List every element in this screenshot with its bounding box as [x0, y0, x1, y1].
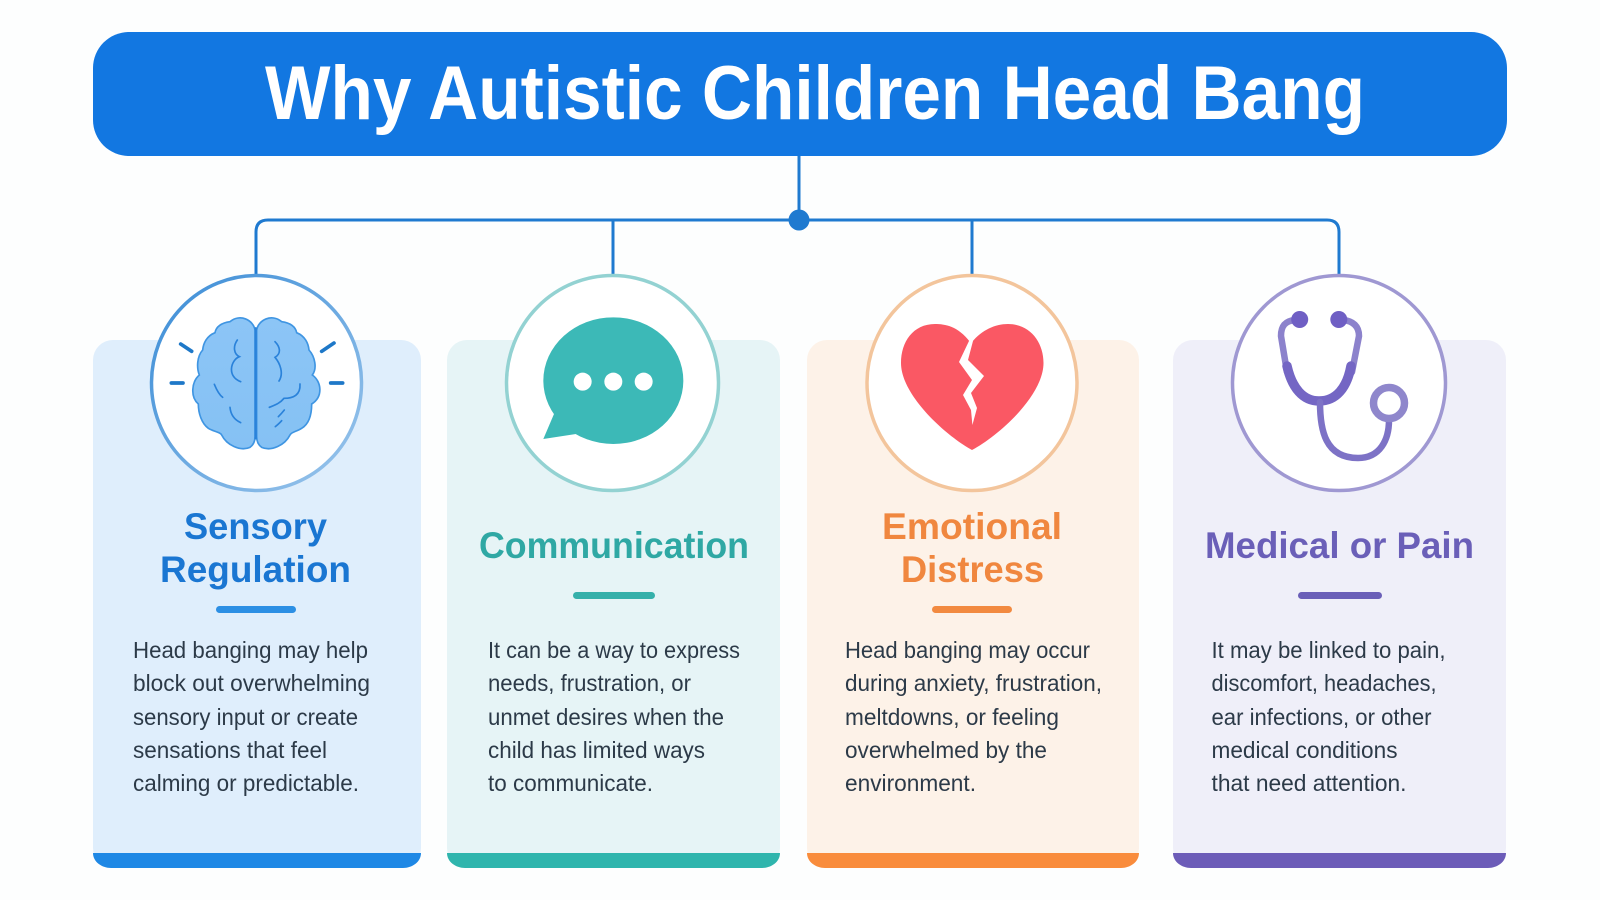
- accent bar: [216, 606, 296, 613]
- body text: discomfort, headaches,: [1212, 670, 1436, 696]
- heading: [160, 506, 351, 590]
- panel: communication: [447, 276, 780, 868]
- body text: [133, 637, 370, 796]
- body text: block out overwhelming: [133, 670, 370, 696]
- body text: environment.: [845, 770, 976, 796]
- body text: meltdowns, or feeling: [845, 704, 1059, 730]
- body text: needs, frustration, or: [488, 670, 691, 696]
- body text: Head banging may occur: [845, 637, 1090, 663]
- accent bar: [1298, 592, 1382, 599]
- body text: It can be a way to express: [488, 637, 740, 663]
- body text: sensory input or create: [133, 704, 358, 730]
- heading: Sensory: [184, 506, 327, 547]
- icon: stethoscope: [1232, 276, 1446, 490]
- body text: that need attention.: [1212, 770, 1406, 796]
- body text: during anxiety, frustration,: [845, 670, 1102, 696]
- body text: sensations that feel: [133, 737, 327, 763]
- heading: Distress: [901, 549, 1044, 590]
- body text: ear infections, or other: [1212, 704, 1432, 730]
- panel: medical or pain: [1173, 276, 1506, 868]
- connector tree: [256, 156, 1339, 276]
- heading: Regulation: [160, 549, 351, 590]
- body text: child has limited ways: [488, 737, 705, 763]
- icon: brain: [152, 276, 362, 490]
- body text: unmet desires when the: [488, 704, 724, 730]
- heading: Emotional: [882, 506, 1062, 547]
- title banner: [93, 32, 1507, 156]
- title text: Why Autistic Children Head Bang: [265, 51, 1365, 136]
- body text: calming or predictable.: [133, 770, 359, 796]
- body text: [488, 637, 740, 796]
- heading: Medical or Pain: [1205, 525, 1474, 566]
- panel: sensory regulation: [93, 276, 421, 868]
- icon: broken heart: [867, 276, 1077, 490]
- body text: [845, 637, 1102, 796]
- heading: [882, 506, 1062, 590]
- body text: to communicate.: [488, 770, 653, 796]
- body text: medical conditions: [1212, 737, 1398, 763]
- accent bar: [573, 592, 655, 599]
- body text: It may be linked to pain,: [1212, 637, 1446, 663]
- panel: emotional distress: [807, 276, 1139, 868]
- body text: overwhelmed by the: [845, 737, 1047, 763]
- icon: speech bubble: [506, 276, 718, 490]
- body text: [1212, 637, 1446, 796]
- accent bar: [932, 606, 1012, 613]
- body text: Head banging may help: [133, 637, 368, 663]
- heading: Communication: [479, 525, 749, 566]
